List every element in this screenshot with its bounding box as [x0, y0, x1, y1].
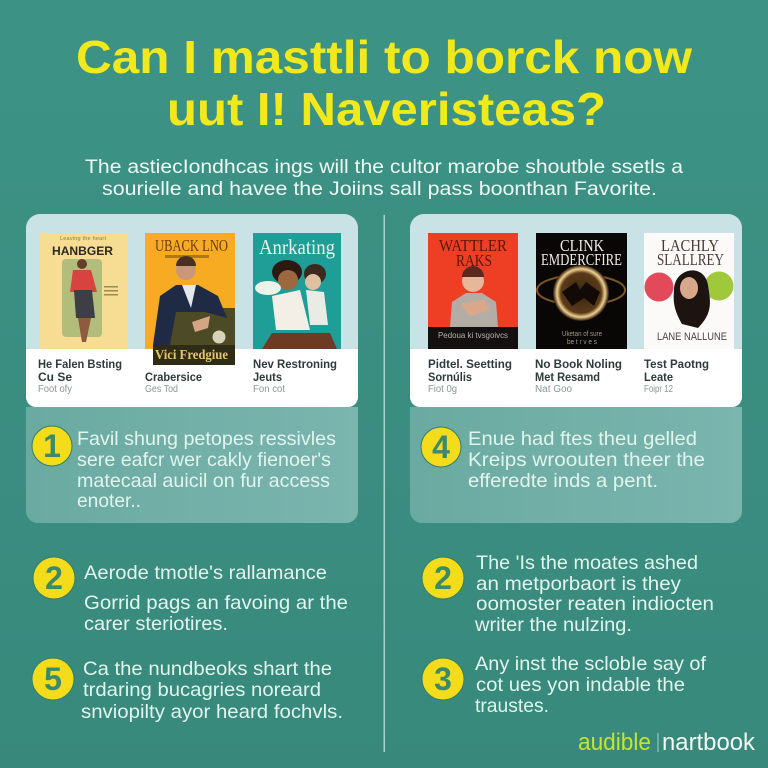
book cover: Lachly Slallrey: LACHLY [661, 236, 719, 255]
book cover: Uback Lno: Vici Fredgiue [155, 348, 228, 363]
step 2 right text: writer the nulzing. [474, 614, 632, 636]
logo [578, 729, 756, 756]
book caption 6 [644, 357, 709, 395]
book caption 5: No Book Noling [535, 357, 622, 371]
step 2 right badge: 2 [434, 560, 452, 596]
book cover: Wattler Raks: RAKS [456, 251, 492, 270]
step 2 text [84, 562, 348, 635]
book cover: Clink Emdercfire: CLINK [560, 236, 605, 255]
step 4 badge: 4 [432, 429, 450, 465]
step 2 right text: an metporbaort is they [476, 573, 681, 595]
step 5 badge [32, 658, 74, 700]
book caption 2 [145, 370, 202, 395]
book cover: Hanbger [40, 233, 128, 349]
book cover: Anrkating: Anrkating [259, 235, 335, 259]
step 3 right [422, 653, 707, 717]
step 2 badge: 2 [45, 560, 63, 596]
step 1 text: sere eafcr wer cakly fienoer's [77, 449, 331, 471]
book caption 4: Sornúlis [428, 370, 472, 384]
book cover: Wattler Raks: Pedoua ki tvsgoivcs [438, 331, 508, 340]
book cover: Lachly Slallrey [644, 233, 734, 349]
step 3 text [475, 653, 707, 717]
step 3 text: traustes. [475, 695, 549, 717]
book caption 5: Nat Goo [535, 384, 572, 395]
title: Can I masttli to borck now [76, 31, 692, 83]
step 5 text [81, 658, 343, 723]
book cover: Lachly Slallrey: LANE NALLUNE [657, 331, 727, 343]
book caption 2: Ges Tod [145, 384, 178, 395]
step 1 text [77, 428, 336, 512]
step 1 text: enoter.. [77, 490, 141, 512]
step 2 right text [474, 552, 714, 636]
step 3 text: cot ues yon indable the [476, 674, 685, 696]
subtitle: sourielle and havee the Joiins sall pass boonthan Favorite. [102, 178, 657, 200]
step 1 text: Favil shung petopes ressivles [77, 428, 336, 450]
step 5 badge: 5 [44, 661, 62, 697]
book caption 6: Test Paotng [644, 357, 709, 371]
book caption 4: Pidtel. Seetting [428, 357, 512, 371]
subtitle [85, 156, 683, 200]
book cover: Clink Emdercfire: EMDERCFIRE [541, 250, 622, 269]
step 2 text: Aerode tmotle's rallamance [84, 562, 327, 584]
step 2 right badge [422, 557, 464, 599]
step 2 left [33, 557, 348, 635]
book cover: Wattler Raks [428, 233, 518, 349]
step 5 left [32, 658, 343, 723]
step 2 right text: The 'Is the moates ashed [476, 552, 698, 574]
book cover: Wattler Raks: WATTLER [439, 236, 508, 255]
book cover: Anrkating [253, 233, 341, 349]
book caption 1: Foot ofy [38, 384, 72, 395]
book cover: Uback Lno [145, 233, 235, 365]
step 5 text: Ca the nundbeoks shart the [83, 658, 332, 680]
book caption 3: Fon cot [253, 384, 285, 395]
step 5 text: snviopilty ayor heard fochvls. [81, 701, 343, 723]
step 3 badge: 3 [434, 661, 452, 697]
step 2 right text: oomoster reaten indiocten [476, 593, 714, 615]
book cover: Hanbger: HANBGER [52, 244, 113, 258]
title [76, 31, 692, 135]
step 1 badge [32, 426, 72, 466]
step 4 text: Enue had ftes theu gelled [468, 428, 697, 450]
book caption 3: Jeuts [253, 370, 282, 384]
book caption 1: He Falen Bsting [38, 357, 122, 371]
book caption 5: Met Resamd [535, 370, 600, 384]
book caption 3 [253, 357, 337, 395]
step 2 text: Gorrid pags an favoing ar the [84, 592, 348, 614]
step 4 badge [421, 427, 461, 467]
step 4 text: efferedte inds a pent. [468, 470, 658, 492]
book caption 2: Crabersice [145, 370, 202, 384]
book caption 5 [535, 357, 622, 395]
step 2 badge [33, 557, 75, 599]
panel: left books and step 1 [26, 214, 358, 523]
subtitle: The astiecIondhcas ings will the cultor marobe shoutble ssetls a [85, 156, 683, 178]
book caption 1: Cu Se [38, 370, 72, 384]
book cover: Uback Lno: UBACK LNO [155, 236, 228, 255]
book cover: Clink Emdercfire: be t r v e s [567, 339, 597, 346]
panel: right books and step 4 [410, 214, 742, 523]
title: uut I! Naveristeas? [167, 83, 606, 135]
step 5 text: trdaring bucagries noreard [83, 679, 321, 701]
step 4 text [468, 428, 705, 492]
book caption 3: Nev Restroning [253, 357, 337, 371]
book caption 6: Foipr 12 [644, 384, 673, 395]
book cover: Clink Emdercfire [536, 233, 627, 349]
step 2 text: carer steriotires. [84, 613, 228, 635]
step 1 badge: 1 [43, 428, 61, 464]
book caption 6: Leate [644, 370, 673, 384]
center divider [384, 215, 385, 752]
book cover: Lachly Slallrey: SLALLREY [657, 250, 724, 269]
book caption 4: Fiot 0g [428, 384, 457, 395]
step 3 text: Any inst the sclobIe say of [475, 653, 707, 675]
book cover: Hanbger: Leaving the heart [60, 236, 106, 242]
step 3 badge [422, 658, 464, 700]
book caption 4 [428, 357, 512, 395]
step 4 text: Kreips wroouten theer the [468, 449, 705, 471]
step 2 right [422, 552, 714, 636]
logo: nartbook [662, 729, 756, 756]
book cover: Clink Emdercfire: Uketan of sure [562, 331, 602, 338]
logo: audible [578, 729, 651, 756]
book caption 1 [38, 357, 122, 395]
step 1 text: matecaal auicil on fur access [77, 470, 330, 492]
